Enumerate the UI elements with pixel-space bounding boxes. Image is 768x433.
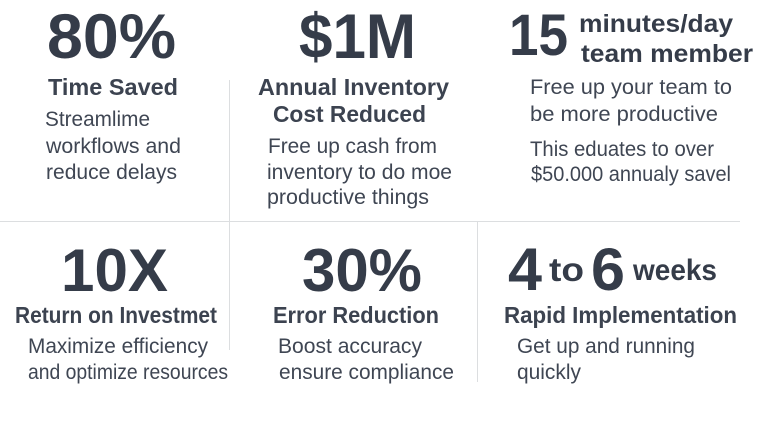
stat: 4 to 6 weeks: weeks <box>632 254 717 287</box>
heading: error reduction: Error Reduction <box>273 302 439 328</box>
panel: rapid implementation <box>504 236 737 384</box>
text: get up and running: Get up and running <box>517 335 695 358</box>
text: free up your team: be more productive <box>530 103 718 126</box>
panel: inventory <box>258 2 452 209</box>
text: boost accuracy: Boost accuracy <box>278 335 422 358</box>
text: free up cash <box>267 135 452 209</box>
text: get up and running: quickly <box>517 361 581 384</box>
heading: annual inventory <box>258 74 449 127</box>
heading: time saved: Time Saved <box>48 74 178 100</box>
stat: 4 to 6 weeks: to <box>549 251 584 288</box>
heading: annual inventory: Cost Reduced <box>273 101 426 127</box>
stat: 30%: 30% <box>302 237 422 304</box>
text: boost accuracy: ensure compliance <box>279 361 454 384</box>
text: maximize efficiency: Maximize efficiency <box>28 335 208 358</box>
stat: $1M: $1M <box>299 2 416 72</box>
stat unit: minutes/day team member <box>579 10 753 68</box>
stat unit: minutes/day team member: team member <box>581 40 753 68</box>
text: maximize efficiency <box>28 335 228 384</box>
stat unit: minutes/day team member: minutes/day <box>579 10 733 38</box>
heading: return on investment: Return on Investmet <box>15 302 217 328</box>
panel: error reduction <box>273 237 454 384</box>
panel: minutes per day <box>509 3 753 186</box>
text: equates to savings <box>530 138 731 186</box>
panel: time saved <box>45 2 181 184</box>
text: maximize efficiency: and optimize resources <box>28 361 228 384</box>
text: equates to savings: This eduates to over <box>530 138 714 161</box>
heading: annual inventory: Annual Inventory <box>258 74 449 100</box>
text: free up cash: productive things <box>267 186 429 209</box>
stat: 15: 15 <box>509 3 568 68</box>
stat: 4 to 6 weeks: 4 <box>508 236 543 303</box>
text: free up cash: Free up cash from <box>268 135 437 158</box>
stat: 4 to 6 weeks: 6 <box>591 236 625 303</box>
stat: 4 to 6 weeks <box>508 236 717 303</box>
text: streamline: reduce delays <box>46 161 177 184</box>
text: equates to savings: $50.000 annualy savel <box>531 163 731 186</box>
text: streamline: workflows and <box>45 135 181 158</box>
text: free up your team: Free up your team to <box>530 76 732 99</box>
panel: return on investment <box>15 237 228 384</box>
text: streamline <box>45 108 181 184</box>
stat: 10X: 10X <box>61 237 168 304</box>
text: free up cash: inventory to do moe <box>267 161 452 184</box>
stat: 80%: 80% <box>47 2 176 72</box>
text: boost accuracy <box>278 335 454 384</box>
text: get up and running <box>517 335 695 384</box>
divider lines <box>0 80 740 382</box>
text: free up your team <box>530 76 732 126</box>
text: streamline: Streamlime <box>45 108 150 131</box>
heading: rapid implementation: Rapid Implementation <box>504 302 737 328</box>
